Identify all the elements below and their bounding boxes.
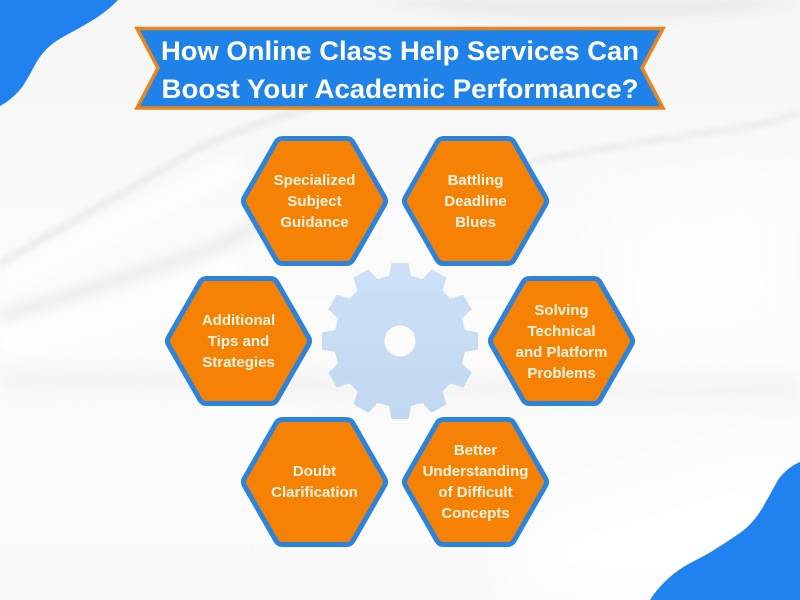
hexagon: Additional Tips and Strategies: Tips and	[208, 333, 269, 350]
hexagon: Solving Technical and Platform Problems	[498, 286, 625, 396]
hexagon: Solving Technical and Platform Problems: Problems	[527, 365, 596, 382]
central gear	[322, 263, 478, 419]
hexagon: Doubt Clarification: Doubt	[293, 463, 336, 480]
decorative blob: top left	[0, 0, 118, 106]
hexagon: Additional Tips and Strategies: Strategies	[202, 354, 275, 371]
hexagon: Better Understanding of Difficult Concepts: Concepts	[441, 505, 510, 522]
hexagon: Specialized Subject Guidance	[251, 146, 378, 256]
hexagon: Better Understanding of Difficult Concepts: Better	[454, 442, 497, 459]
hexagon: Specialized Subject Guidance: Subject	[287, 193, 342, 210]
decorative blob: bottom right	[650, 462, 800, 600]
hexagon: Doubt Clarification: Clarification	[271, 484, 358, 501]
hexagon: Battling Deadline Blues	[412, 146, 539, 256]
title text: How Online Class Help Services Can	[161, 36, 639, 66]
hexagon: Additional Tips and Strategies	[175, 286, 302, 396]
title text: Boost Your Academic Performance?	[162, 74, 638, 104]
hexagon: Solving Technical and Platform Problems: Technical	[527, 323, 596, 340]
title banner	[137, 28, 663, 108]
title text	[161, 36, 639, 104]
hexagon: Battling Deadline Blues: Deadline	[444, 193, 507, 210]
hexagon: Battling Deadline Blues: Blues	[455, 214, 496, 231]
hexagon: Additional Tips and Strategies: Additional	[202, 312, 275, 329]
hexagon: Specialized Subject Guidance: Specialized	[274, 172, 355, 189]
hexagon: Better Understanding of Difficult Concepts: Understanding	[423, 463, 528, 480]
hexagon: Better Understanding of Difficult Concepts	[412, 427, 539, 537]
hexagon: Battling Deadline Blues: Battling	[448, 172, 503, 189]
hexagon: Doubt Clarification	[251, 427, 378, 537]
hexagon: Better Understanding of Difficult Concepts: of Difficult	[438, 484, 513, 501]
hexagon: Solving Technical and Platform Problems: and Platform	[516, 344, 607, 361]
hexagon: Specialized Subject Guidance: Guidance	[280, 214, 349, 231]
hexagon: Solving Technical and Platform Problems: Solving	[534, 302, 589, 319]
